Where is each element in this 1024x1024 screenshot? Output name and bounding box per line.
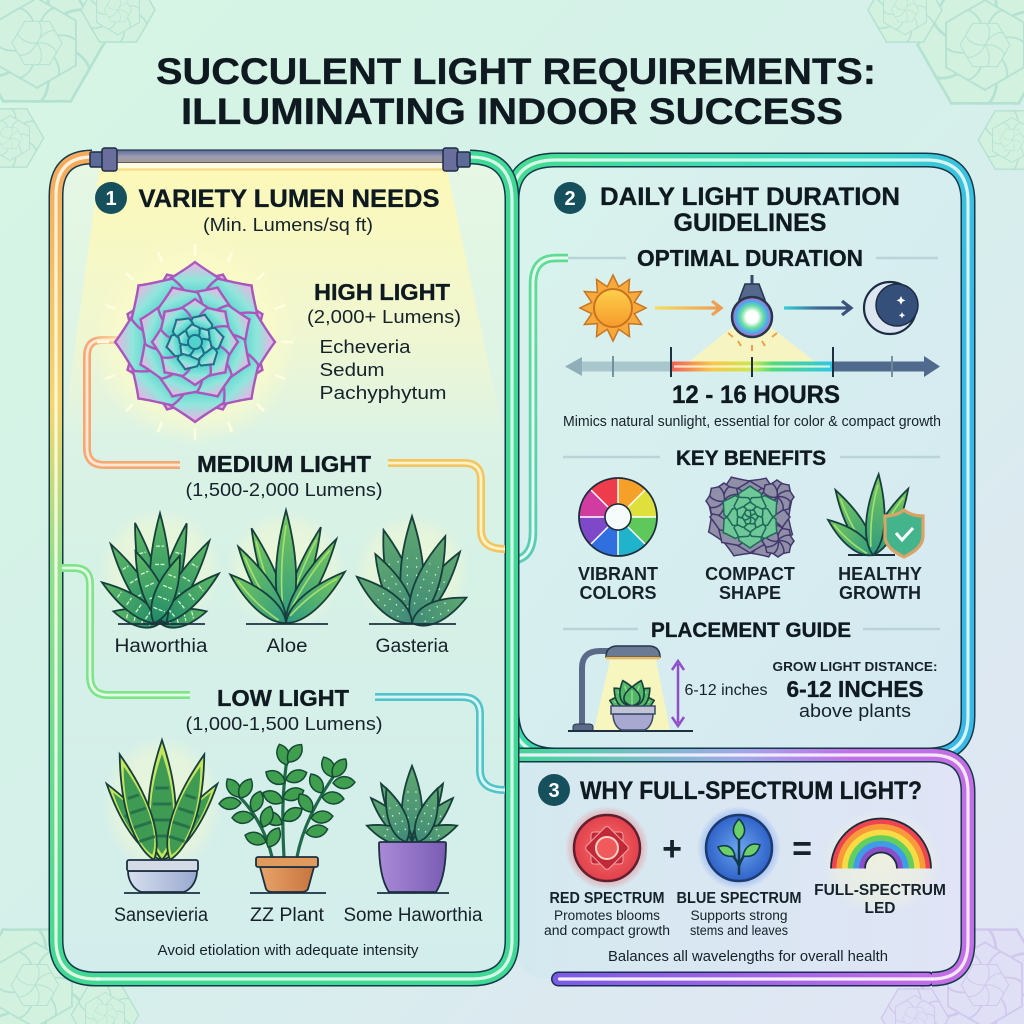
text: high light: Echeveria bbox=[320, 336, 411, 357]
text: compact shape: SHAPE bbox=[719, 583, 781, 603]
panel: why full-spectrum bbox=[512, 755, 968, 986]
text: duration: 12 - 16 HOURS bbox=[672, 381, 840, 409]
icon: grow lamp bbox=[568, 646, 693, 731]
text: blue spectrum: stems and leaves bbox=[690, 923, 788, 938]
text: full-spectrum led: LED bbox=[864, 900, 896, 917]
text: duration bbox=[563, 381, 941, 430]
connector yellow bbox=[388, 463, 505, 549]
heading 1: (Min. Lumens/sq ft) bbox=[203, 215, 373, 235]
plant: haworthia: Haworthia bbox=[114, 636, 208, 657]
text: grow light distance: above plants bbox=[799, 701, 911, 721]
heading 1 bbox=[95, 182, 440, 235]
text: compact shape: COMPACT bbox=[705, 564, 795, 584]
text: grow light distance: 6-12 INCHES bbox=[786, 676, 924, 702]
text: vibrant colors: VIBRANT bbox=[578, 564, 658, 584]
heading 1: VARIETY LUMEN NEEDS bbox=[138, 185, 440, 213]
text: high light: (2,000+ Lumens) bbox=[307, 307, 461, 327]
text: low light bbox=[186, 685, 382, 734]
equals: = bbox=[792, 830, 812, 868]
icon: colour wheel bbox=[579, 478, 657, 556]
arrow sun to bulb bbox=[655, 301, 721, 315]
icon: led bulb bbox=[686, 275, 818, 364]
text: red spectrum bbox=[544, 890, 670, 938]
text: healthy growth: HEALTHY bbox=[838, 564, 922, 584]
text: blue spectrum bbox=[676, 890, 802, 938]
text: high light bbox=[307, 279, 461, 403]
heading 2: GUIDELINES bbox=[674, 209, 826, 237]
text: grow light distance: GROW LIGHT DISTANCE: bbox=[772, 659, 938, 674]
plant: zz plant: ZZ Plant bbox=[250, 905, 325, 926]
icon: sun bbox=[580, 275, 646, 341]
text: vibrant colors: COLORS bbox=[579, 583, 657, 603]
heading 3: 3 bbox=[548, 780, 560, 802]
heading placement guide: PLACEMENT GUIDE bbox=[651, 619, 851, 642]
icon: healthy growth bbox=[823, 474, 923, 561]
heading 2 bbox=[554, 182, 900, 237]
title: ILLUMINATING INDOOR SUCCESS bbox=[181, 90, 843, 132]
icon: moon bbox=[864, 282, 918, 334]
heading 3: WHY FULL-SPECTRUM LIGHT? bbox=[580, 777, 922, 805]
icon: compact succulent bbox=[691, 461, 809, 573]
plant: gasteria bbox=[350, 514, 471, 657]
footnote panel 1: Avoid etiolation with adequate intensity bbox=[158, 942, 419, 959]
plant: aloe bbox=[224, 510, 351, 657]
plant: sansevieria: Sansevieria bbox=[114, 905, 208, 926]
plant: gasteria: Gasteria bbox=[376, 636, 449, 657]
title bbox=[156, 50, 876, 132]
text: high light: Sedum bbox=[320, 359, 384, 380]
text: high light: HIGH LIGHT bbox=[314, 279, 450, 305]
panel: daily light duration bbox=[512, 160, 968, 755]
text: blue spectrum: Supports strong bbox=[690, 908, 788, 923]
text: low light: (1,000-1,500 Lumens) bbox=[186, 714, 382, 734]
plus: + bbox=[662, 830, 682, 868]
icon: blue spectrum bbox=[697, 806, 781, 890]
text: medium light bbox=[186, 451, 382, 500]
icon: rainbow bbox=[821, 810, 941, 914]
light beam bbox=[62, 166, 505, 440]
title: SUCCULENT LIGHT REQUIREMENTS: bbox=[156, 50, 876, 92]
heading 2: DAILY LIGHT DURATION bbox=[600, 183, 900, 211]
connector orange bbox=[87, 340, 180, 465]
icon: red spectrum bbox=[565, 806, 649, 890]
arrow distance bbox=[672, 661, 684, 726]
footnote panel 3: Balances all wavelengths for overall health bbox=[608, 949, 888, 965]
plant: zz plant bbox=[219, 741, 355, 926]
text: red spectrum: RED SPECTRUM bbox=[550, 890, 664, 907]
text: blue spectrum: BLUE SPECTRUM bbox=[676, 890, 802, 907]
text: red spectrum: Promotes blooms bbox=[554, 908, 660, 923]
label 6-12 inches: 6-12 inches bbox=[684, 682, 768, 699]
icon: echeveria rosette bbox=[91, 238, 299, 446]
text: healthy growth: GROWTH bbox=[839, 583, 921, 603]
connector green bbox=[62, 568, 190, 695]
plant: sansevieria bbox=[99, 735, 225, 926]
plant: haworthia bbox=[97, 508, 224, 657]
text: grow light distance bbox=[772, 659, 938, 721]
text: medium light: MEDIUM LIGHT bbox=[197, 451, 371, 477]
arrow bulb to moon bbox=[784, 301, 851, 315]
heading 2: 2 bbox=[564, 188, 576, 210]
icon: light tube bbox=[90, 148, 470, 171]
heading 1: 1 bbox=[105, 188, 117, 210]
heading optimal duration: OPTIMAL DURATION bbox=[637, 245, 863, 271]
text: high light: Pachyphytum bbox=[320, 382, 446, 403]
connector teal bbox=[375, 697, 505, 790]
text: low light: LOW LIGHT bbox=[217, 685, 349, 711]
text: red spectrum: and compact growth bbox=[544, 923, 670, 938]
plant: some haworthia: Some Haworthia bbox=[344, 905, 483, 926]
heading key benefits: KEY BENEFITS bbox=[676, 447, 826, 470]
timeline bbox=[565, 347, 940, 377]
plant: aloe: Aloe bbox=[266, 636, 308, 657]
text: medium light: (1,500-2,000 Lumens) bbox=[186, 480, 382, 500]
panel: variety lumen needs bbox=[56, 148, 512, 979]
text: full-spectrum led: FULL-SPECTRUM bbox=[814, 882, 946, 899]
connector green bbox=[516, 258, 568, 560]
plant: some haworthia bbox=[344, 766, 483, 926]
text: duration: Mimics natural sunlight, essential for color & compact growth bbox=[563, 414, 941, 430]
